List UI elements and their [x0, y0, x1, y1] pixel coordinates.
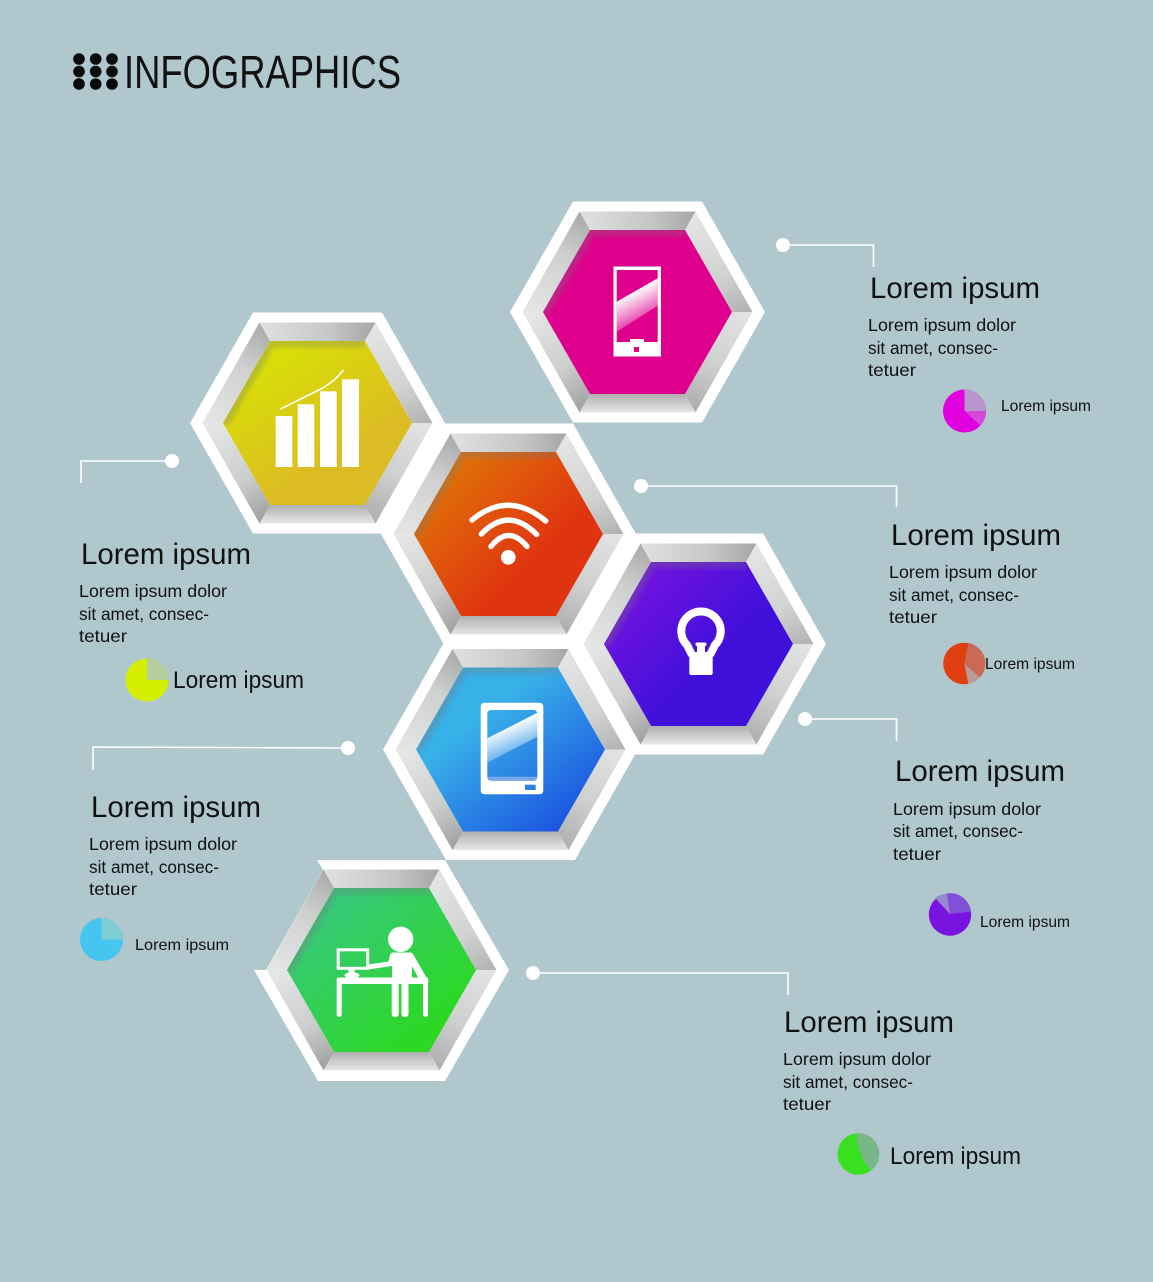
body text: sit amet, consec- — [868, 338, 998, 358]
pie chart — [126, 658, 168, 702]
panel: yellow callout — [79, 454, 304, 702]
heading: Lorem ipsum — [81, 538, 251, 571]
body text: sit amet, consec- — [79, 604, 209, 624]
body text: Lorem ipsum dolor — [889, 562, 1037, 582]
pie label: Lorem ipsum — [890, 1143, 1021, 1170]
body text: sit amet, consec- — [889, 585, 1019, 605]
heading: Lorem ipsum — [784, 1006, 954, 1039]
body text: sit amet, consec- — [89, 857, 219, 877]
hexagon: blue tablet — [383, 639, 638, 860]
pie chart — [80, 918, 123, 961]
leader line — [798, 712, 896, 741]
body text — [89, 834, 237, 899]
body text: sit amet, consec- — [893, 821, 1023, 841]
icon: light bulb — [681, 611, 721, 675]
body text: tetuer — [783, 1094, 831, 1114]
pie label: Lorem ipsum — [1001, 398, 1091, 415]
hexagon: orange wifi — [381, 424, 636, 644]
panel: purple callout — [798, 712, 1070, 936]
icon: wifi — [472, 505, 546, 565]
icon: tablet — [481, 703, 543, 794]
panel: blue callout — [80, 741, 355, 961]
body text: tetuer — [889, 607, 937, 627]
body text: Lorem ipsum dolor — [783, 1049, 931, 1069]
body text: tetuer — [79, 626, 127, 646]
body text: Lorem ipsum dolor — [89, 834, 237, 854]
leader line — [81, 454, 179, 483]
hexagon: green worker — [254, 860, 509, 1081]
pie chart — [943, 643, 985, 684]
body text — [868, 315, 1016, 380]
leader line — [93, 741, 355, 770]
icon: dot grid — [73, 53, 118, 90]
pie label: Lorem ipsum — [173, 667, 304, 694]
hexagon: yellow chart — [190, 312, 445, 534]
leader line — [776, 238, 874, 267]
icon: bar chart — [276, 370, 359, 467]
leader line — [634, 479, 896, 507]
body text — [889, 562, 1037, 627]
body text: tetuer — [868, 360, 916, 380]
heading: Lorem ipsum — [895, 755, 1065, 788]
icon: smartphone — [614, 266, 661, 356]
heading text: INFOGRAPHICS — [124, 46, 401, 98]
hexagon: purple bulb — [571, 534, 826, 754]
pie label: Lorem ipsum — [985, 656, 1075, 673]
pie label: Lorem ipsum — [135, 937, 229, 954]
body text — [79, 581, 227, 646]
panel: pink callout — [776, 238, 1091, 432]
panel: green callout — [526, 966, 1021, 1175]
body text — [893, 799, 1041, 864]
heading: Lorem ipsum — [891, 519, 1061, 552]
body text: tetuer — [893, 844, 941, 864]
pie chart — [943, 390, 986, 432]
body text: Lorem ipsum dolor — [79, 581, 227, 601]
body text: tetuer — [89, 879, 137, 899]
icon: person at desk — [337, 927, 428, 1017]
pie chart — [929, 893, 971, 936]
body text: Lorem ipsum dolor — [868, 315, 1016, 335]
title — [73, 46, 401, 98]
heading: Lorem ipsum — [870, 272, 1040, 305]
body text: sit amet, consec- — [783, 1072, 913, 1092]
pie label: Lorem ipsum — [980, 914, 1070, 931]
leader line — [526, 966, 788, 995]
body text: Lorem ipsum dolor — [893, 799, 1041, 819]
body text — [783, 1049, 931, 1114]
pie chart — [838, 1133, 879, 1175]
hexagon: pink phone — [510, 202, 765, 422]
heading: Lorem ipsum — [91, 791, 261, 824]
panel: orange callout — [634, 479, 1075, 684]
